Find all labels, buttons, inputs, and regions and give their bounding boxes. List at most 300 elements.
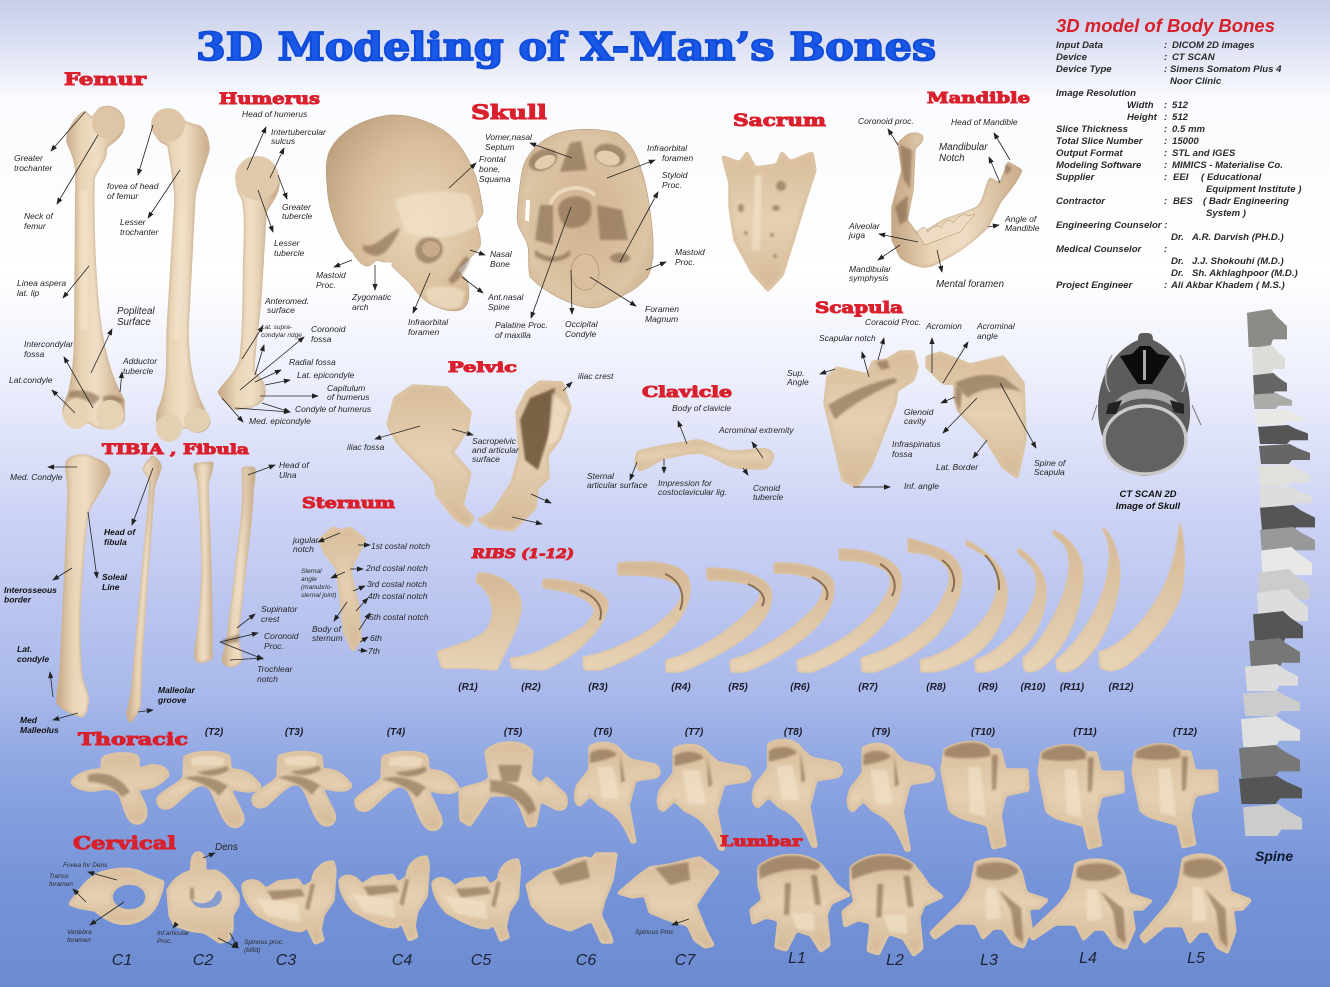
rib labels: (R6)	[790, 682, 810, 693]
heading: thoracic: Thoracic	[78, 730, 188, 750]
panel: project information	[1056, 16, 1301, 291]
humerus labels: tubercle	[274, 248, 305, 258]
femur labels: of femur	[107, 191, 139, 201]
tibia fibula labels: Soleal	[102, 572, 127, 582]
cervical labels: Proc.	[157, 938, 172, 945]
CT scan caption: CT SCAN 2D	[1119, 489, 1177, 500]
pelvic medial view	[388, 386, 473, 526]
skull labels: Mastoid	[675, 247, 705, 257]
tibia fibula labels: border	[4, 594, 32, 604]
rib 6	[797, 549, 901, 672]
femur labels: trochanter	[14, 163, 53, 173]
clavicle labels	[587, 403, 794, 502]
tibia fibula labels: Coronoid	[264, 631, 298, 641]
info table: 512	[1172, 112, 1189, 123]
info table: :	[1164, 196, 1167, 207]
femur anterior view	[63, 106, 124, 430]
skull labels: bone,	[479, 164, 500, 174]
lumbar names: L3	[980, 952, 998, 969]
vertebra T9	[849, 744, 934, 850]
rib labels: (R8)	[926, 682, 946, 693]
thoracic labels: (T3)	[285, 727, 304, 738]
tibia fibula labels: Interosseous	[4, 585, 57, 595]
skull labels: Zygomatic	[352, 292, 391, 302]
info table: 512	[1172, 100, 1189, 111]
mandible labels: Notch	[939, 153, 965, 164]
femur labels: tubercle	[123, 366, 154, 376]
sternum labels: sternal joint)	[301, 592, 336, 599]
heading: humerus: Humerus	[219, 89, 320, 108]
vertebra L5	[1141, 855, 1250, 952]
scapula labels: Acromion	[925, 321, 962, 331]
info table: Dr.	[1171, 256, 1184, 267]
rib 4	[666, 568, 772, 672]
skull labels: foramen	[408, 327, 439, 337]
mandible labels: Coronoid proc.	[858, 116, 914, 126]
info table: :	[1164, 40, 1167, 51]
heading: sacrum: Sacrum	[733, 111, 826, 131]
skull labels: Spine	[488, 302, 510, 312]
cervical labels: foramen	[49, 881, 73, 888]
info table: Project Engineer	[1056, 280, 1134, 291]
cervical names	[112, 952, 696, 969]
CT scan caption: Image of Skull	[1116, 501, 1181, 512]
ulna bone	[222, 467, 255, 667]
panel: sternum	[292, 494, 430, 656]
scapula labels: cavity	[904, 416, 926, 426]
sternum labels: 4th costal notch	[368, 591, 428, 601]
femur labels: femur	[24, 221, 47, 231]
cervical names: C4	[392, 952, 412, 969]
info table: :	[1164, 100, 1167, 111]
scapula labels: Glenoid	[904, 407, 933, 417]
skull labels: Nasal	[490, 249, 512, 259]
info table: Supplier	[1056, 172, 1096, 183]
info table: System )	[1206, 208, 1246, 219]
scapula labels: Scapula	[1034, 467, 1065, 477]
vertebra T7	[659, 745, 750, 849]
femur labels	[9, 153, 159, 385]
panel: mandible	[848, 89, 1040, 290]
skull labels: Styloid	[662, 170, 688, 180]
info table: :	[1164, 112, 1167, 123]
info table: Modeling Software	[1056, 160, 1142, 171]
mandible labels: Alveolar	[849, 221, 880, 231]
radius bone	[194, 462, 213, 662]
skull side view	[326, 115, 483, 311]
rib labels: (R9)	[978, 682, 998, 693]
lumbar names: L4	[1079, 950, 1097, 967]
humerus labels: fossa	[311, 334, 332, 344]
scapula labels: Angle	[786, 377, 809, 387]
info table: 0.5 mm	[1172, 124, 1206, 135]
sternum labels: jugular	[293, 535, 319, 545]
thoracic labels: (T7)	[685, 727, 704, 738]
femur labels: Neck of	[24, 211, 53, 221]
tibia fibula labels: Head of	[279, 460, 309, 470]
info table: EEI	[1173, 172, 1189, 183]
tibia fibula labels	[4, 460, 310, 735]
mandible labels: Head of Mandible	[951, 117, 1018, 127]
skull labels: Proc.	[675, 257, 695, 267]
info table: A.R. Darvish (PH.D.)	[1191, 232, 1284, 243]
femur labels: Popliteal	[117, 306, 155, 317]
skull labels: Foramen	[645, 304, 679, 314]
rib 5	[730, 563, 834, 672]
tibia fibula labels: Malleolar	[158, 685, 195, 695]
info table: Ali Akbar Khadem ( M.S.)	[1170, 280, 1285, 291]
vertebra C1	[70, 869, 163, 923]
heading: pelvic: Pelvic	[448, 360, 517, 376]
mandible labels: Mandible	[1005, 223, 1040, 233]
scapula labels	[786, 317, 1067, 491]
info table: :	[1164, 172, 1167, 183]
info table: Output Format	[1056, 148, 1123, 159]
fibula bone	[127, 456, 161, 723]
humerus labels: surface	[267, 305, 295, 315]
clavicle labels: costoclavicular lig.	[658, 487, 727, 497]
cervical names: C5	[471, 952, 491, 969]
skull labels: Ant.nasal	[488, 292, 523, 302]
panel: lumbar vertebrae	[720, 834, 1250, 969]
info table: DICOM 2D images	[1172, 40, 1255, 51]
info table: Simens Somatom Plus 4	[1170, 64, 1282, 75]
info table: Engineering Counselor :	[1056, 220, 1167, 231]
heading: tibia fibula: TIBIA , Fibula	[102, 442, 249, 458]
sternum labels: 3rd costal notch	[367, 579, 427, 589]
vertebra T8	[754, 740, 841, 846]
thoracic labels: (T12)	[1173, 727, 1198, 738]
skull labels: Magnum	[645, 314, 678, 324]
mandible labels: Mandibular	[939, 142, 987, 153]
scapula labels: Spine of	[1034, 458, 1065, 468]
mandible labels: Mental foramen	[936, 279, 1004, 290]
panel: ribs	[437, 522, 1184, 693]
info table: 15000	[1172, 136, 1199, 147]
clavicle labels: Body of clavicle	[672, 403, 731, 413]
clavicle labels: articular surface	[587, 480, 648, 490]
tibia fibula labels: Lat.	[17, 644, 32, 654]
heading: lumbar: Lumbar	[720, 834, 803, 850]
title: 3D Modeling of X-Man’s Bones	[196, 24, 936, 69]
skull inferior view	[517, 129, 653, 308]
panel: CT scan	[1092, 333, 1201, 512]
info table: Height	[1127, 112, 1158, 123]
femur labels: fossa	[24, 349, 45, 359]
vertebra T6	[576, 743, 659, 842]
skull labels: Frontal	[479, 154, 505, 164]
rib labels: (R7)	[858, 682, 878, 693]
humerus labels: Lat. epicondyle	[297, 370, 354, 380]
vertebra L1	[751, 855, 849, 951]
panel: pelvic	[347, 360, 614, 530]
pelvic labels: surface	[472, 454, 500, 464]
humerus labels: Head of humerus	[242, 109, 308, 119]
cervical labels: Vertebra	[67, 929, 92, 936]
info heading: 3D model of Body Bones	[1056, 16, 1275, 36]
info table: Dr.	[1171, 232, 1184, 243]
clavicle labels: tubercle	[753, 492, 784, 502]
lumbar names: L1	[788, 950, 806, 967]
tibia fibula labels: groove	[157, 695, 187, 705]
femur labels: Adductor	[123, 356, 157, 366]
skull labels: Vomer,nasal	[485, 132, 532, 142]
sternum labels: 2nd costal notch	[365, 563, 428, 573]
info table	[1056, 40, 1301, 291]
skull labels: foramen	[662, 153, 693, 163]
heading: sternum: Sternum	[302, 494, 395, 512]
skull labels: of maxilla	[495, 330, 531, 340]
rib labels: (R2)	[521, 682, 541, 693]
femur labels: Intercondylar	[24, 339, 73, 349]
cervical names: C2	[193, 952, 213, 969]
info table: :	[1164, 244, 1167, 255]
sternum labels	[292, 535, 430, 656]
cervical labels: Dens	[215, 842, 238, 853]
skull labels: Infraorbital	[647, 143, 687, 153]
lumbar names: L2	[886, 952, 904, 969]
lumbar names	[788, 950, 1205, 969]
info table: Sh. Akhlaghpoor (M.D.)	[1192, 268, 1298, 279]
vertebra T1	[72, 754, 168, 823]
sternum labels: Body of	[312, 624, 341, 634]
heading: clavicle: Clavicle	[642, 383, 732, 401]
mandible labels: Angle of	[1005, 214, 1036, 224]
rib labels: (R4)	[671, 682, 691, 693]
humerus labels: Med. epicondyle	[249, 416, 311, 426]
panel: clavicle	[587, 383, 794, 502]
info table: :	[1164, 160, 1167, 171]
femur labels: trochanter	[120, 227, 159, 237]
tibia fibula labels: Head of	[104, 527, 135, 537]
rib 12	[1099, 522, 1184, 671]
sternum labels: notch	[293, 544, 314, 554]
cervical labels: Fovea for Dens	[63, 862, 108, 869]
info table: :	[1164, 148, 1167, 159]
cervical labels: Inf.articular	[157, 930, 189, 937]
femur labels: lat. lip	[17, 288, 39, 298]
sternum arrows	[318, 533, 370, 651]
info table: Device	[1056, 52, 1088, 63]
tibia fibula arrows	[48, 465, 275, 720]
heading: scapula: Scapula	[815, 298, 903, 317]
mandible labels: Mandibular	[849, 264, 891, 274]
sternum labels: Sternal	[301, 568, 322, 575]
cervical labels: foramen	[67, 937, 91, 944]
vertebra C5	[433, 860, 519, 940]
tibia fibula labels: Med. Condyle	[10, 472, 63, 482]
tibia fibula labels: Line	[102, 582, 120, 592]
info table: Device Type	[1056, 64, 1112, 75]
heading: cervical: Cervical	[73, 833, 176, 854]
info table: MIMICS - Materialise Co.	[1172, 160, 1283, 171]
sternum labels: (manubrio-	[301, 584, 333, 591]
info table: BES	[1173, 196, 1193, 207]
info table: :	[1164, 64, 1167, 75]
tibia fibula labels: Med	[20, 715, 37, 725]
vertebra T10	[942, 742, 1028, 848]
heading: ribs: RIBS (1-12)	[471, 547, 574, 562]
vertebra T3	[253, 752, 351, 825]
thoracic labels: (T4)	[387, 727, 406, 738]
info table: Contractor	[1056, 196, 1106, 207]
skull labels: Mastoid	[316, 270, 346, 280]
femur labels: Lesser	[120, 217, 146, 227]
thoracic labels: (T10)	[971, 727, 996, 738]
sternum labels: 5th costal notch	[369, 612, 429, 622]
thoracic labels: (T6)	[594, 727, 613, 738]
thoracic labels: (T8)	[784, 727, 803, 738]
humerus labels: Radial fossa	[289, 357, 336, 367]
pelvic lateral view	[479, 382, 570, 530]
rib labels: (R11)	[1060, 682, 1085, 693]
mandible labels	[848, 116, 1040, 290]
heading: skull: Skull	[471, 100, 548, 124]
info table: Slice Thickness	[1056, 124, 1128, 135]
spine column	[1239, 309, 1315, 836]
humerus labels: sulcus	[271, 136, 296, 146]
vertebra T11	[1039, 746, 1123, 848]
info table: Noor Clinic	[1170, 76, 1222, 87]
CT scan image	[1092, 333, 1201, 476]
pelvic labels: iliac crest	[578, 371, 614, 381]
info table: CT SCAN	[1172, 52, 1216, 63]
cervical names: C6	[576, 952, 596, 969]
panel: humerus	[218, 89, 372, 426]
rib 10	[1023, 530, 1083, 672]
scapula labels: Infraspinatus	[892, 439, 941, 449]
vertebra T2	[158, 752, 260, 826]
tibia fibula labels: Ulna	[279, 470, 297, 480]
pelvic labels: Sacropelvic	[472, 436, 516, 446]
humerus labels: Greater	[282, 202, 311, 212]
humerus labels: Coronoid	[311, 324, 346, 334]
humerus labels: Condyle of humerus	[295, 404, 372, 414]
femur posterior view	[151, 108, 210, 442]
info table: Width	[1127, 100, 1154, 111]
vertebra L2	[843, 856, 942, 955]
skull labels: Proc.	[316, 280, 336, 290]
rib 9	[975, 548, 1046, 672]
scapula anterior	[927, 353, 1025, 477]
skull arrows	[334, 143, 666, 318]
rib labels: (R10)	[1020, 682, 1046, 693]
tibia fibula labels: Malleolus	[20, 725, 59, 735]
cervical names: C1	[112, 952, 132, 969]
skull labels: Condyle	[565, 329, 596, 339]
femur labels: Lat.condyle	[9, 375, 53, 385]
vertebra T12	[1133, 745, 1217, 847]
clavicle labels: Conoid	[753, 483, 780, 493]
scapula labels: angle	[977, 331, 998, 341]
femur arrows	[51, 112, 180, 413]
rib 7	[861, 538, 962, 672]
scapula labels: Lat. Border	[936, 462, 979, 472]
mandible labels: symphysis	[849, 273, 889, 283]
heading: femur: Femur	[64, 70, 147, 90]
skull labels: Occipital	[565, 319, 598, 329]
rib 8	[920, 540, 1007, 672]
vertebra C6	[527, 854, 616, 942]
panel: thoracic vertebrae	[72, 727, 1217, 850]
skull labels: Proc.	[662, 180, 682, 190]
sternum labels: angle	[301, 576, 317, 583]
rib 11	[1056, 527, 1120, 672]
sternum labels: sternum	[312, 633, 343, 643]
tibia fibula labels: Supinator	[261, 604, 297, 614]
tibia bone	[57, 455, 110, 717]
info table: STL and IGES	[1172, 148, 1236, 159]
panel: skull	[316, 100, 705, 340]
cervical labels: Spinous proc.	[244, 939, 284, 946]
skull labels: Septum	[485, 142, 514, 152]
rib labels: (R3)	[588, 682, 608, 693]
vertebra C2	[168, 853, 238, 942]
pelvic labels	[347, 371, 614, 464]
cervical names: C7	[675, 952, 696, 969]
scapula labels: Acrominal	[977, 321, 1015, 331]
humerus labels	[242, 109, 372, 426]
rib 3	[583, 562, 690, 670]
cervical labels: Spinous Proc	[635, 929, 674, 936]
cervical arrows	[73, 853, 689, 948]
vertebra L4	[1029, 860, 1151, 948]
cervical names: C3	[276, 952, 296, 969]
scapula labels: Sup.	[787, 368, 804, 378]
sternum labels: 6th	[370, 633, 382, 643]
lumbar names: L5	[1187, 950, 1205, 967]
tibia fibula labels: condyle	[17, 654, 49, 664]
rib labels: (R1)	[458, 682, 478, 693]
humerus labels: Capitulum	[327, 383, 365, 393]
thoracic labels: (T9)	[872, 727, 891, 738]
sacrum bone	[723, 153, 815, 290]
vertebra C3	[243, 862, 335, 943]
sternum labels: 7th	[368, 646, 380, 656]
clavicle labels: Impression for	[658, 478, 712, 488]
tibia fibula labels: crest	[261, 614, 280, 624]
vertebra L3	[931, 859, 1047, 947]
humerus arrows	[222, 127, 318, 422]
rib 2	[510, 579, 608, 670]
info table: Medical Counselor	[1056, 244, 1143, 255]
tibia fibula labels: Proc.	[264, 641, 284, 651]
info table: :	[1164, 280, 1167, 291]
femur labels: Surface	[117, 317, 151, 328]
mandible bone	[892, 133, 1022, 267]
info table: ( Badr Engineering	[1203, 196, 1289, 207]
pelvic labels: and articular	[472, 445, 520, 455]
humerus labels: of humerus	[327, 392, 370, 402]
scapula labels: Inf. angle	[904, 481, 939, 491]
pelvic labels: iliac fossa	[347, 442, 385, 452]
pelvic arrows	[375, 382, 572, 524]
rib labels: (R5)	[728, 682, 748, 693]
info table: Equipment Institute )	[1206, 184, 1301, 195]
cervical labels	[49, 842, 674, 954]
vertebra C4	[340, 857, 428, 940]
cervical labels: (bifid)	[244, 947, 260, 954]
vertebra C7	[619, 858, 718, 947]
spine label: Spine	[1255, 848, 1293, 864]
info table: ( Educational	[1201, 172, 1262, 183]
clavicle bone	[636, 441, 772, 470]
humerus labels: Lesser	[274, 238, 300, 248]
scapula posterior	[825, 352, 917, 487]
femur labels: Greater	[14, 153, 43, 163]
info table: :	[1164, 124, 1167, 135]
sternum labels: 1st costal notch	[371, 541, 430, 551]
